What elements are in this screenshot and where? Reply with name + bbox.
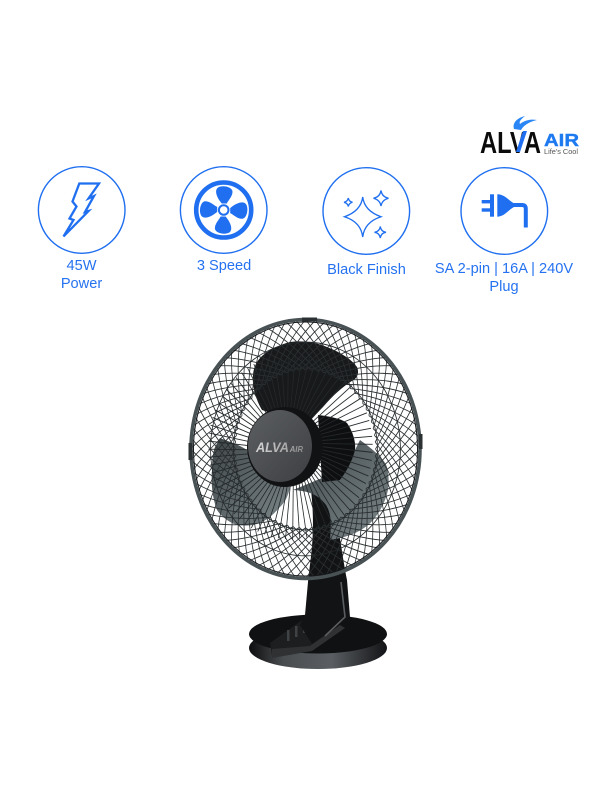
label: SA plug specification: Plug (489, 279, 519, 295)
label: 45W Power: Power (61, 276, 102, 292)
outer rim (188, 318, 422, 578)
label: 3 Speed: 3 Speed (197, 258, 251, 274)
logo wordmark ALVA: ALVA (480, 125, 541, 160)
logo: Alva Air (480, 116, 579, 160)
logo swoosh (514, 116, 537, 152)
logo tagline: Life's Cool (544, 147, 578, 156)
label: 45W Power: 45W (66, 258, 97, 274)
feature: plug (435, 168, 573, 295)
fan neck (300, 490, 350, 644)
hub cap (248, 410, 312, 482)
blade: left (212, 438, 290, 526)
blade: right (293, 415, 389, 540)
icon: sparkles (323, 168, 410, 254)
hub logo: ALVAAIR (255, 439, 304, 455)
logo wordmark AIR: AIR (544, 130, 579, 150)
label: SA plug specification: SA 2-pin | 16A | 240V (435, 261, 573, 277)
icon: fan (180, 167, 267, 253)
icon: plug (461, 168, 548, 254)
icon: lightning bolt (38, 167, 125, 253)
neck highlight (325, 582, 345, 636)
product: desk fan (166, 292, 445, 669)
feature: speed (180, 167, 267, 274)
fan base (249, 614, 387, 669)
blade: top (253, 341, 358, 425)
label: Black Finish: Black Finish (327, 262, 406, 278)
motor housing (247, 407, 323, 487)
feature: power (38, 167, 125, 292)
wire guard (166, 292, 445, 606)
feature: finish (323, 168, 410, 278)
